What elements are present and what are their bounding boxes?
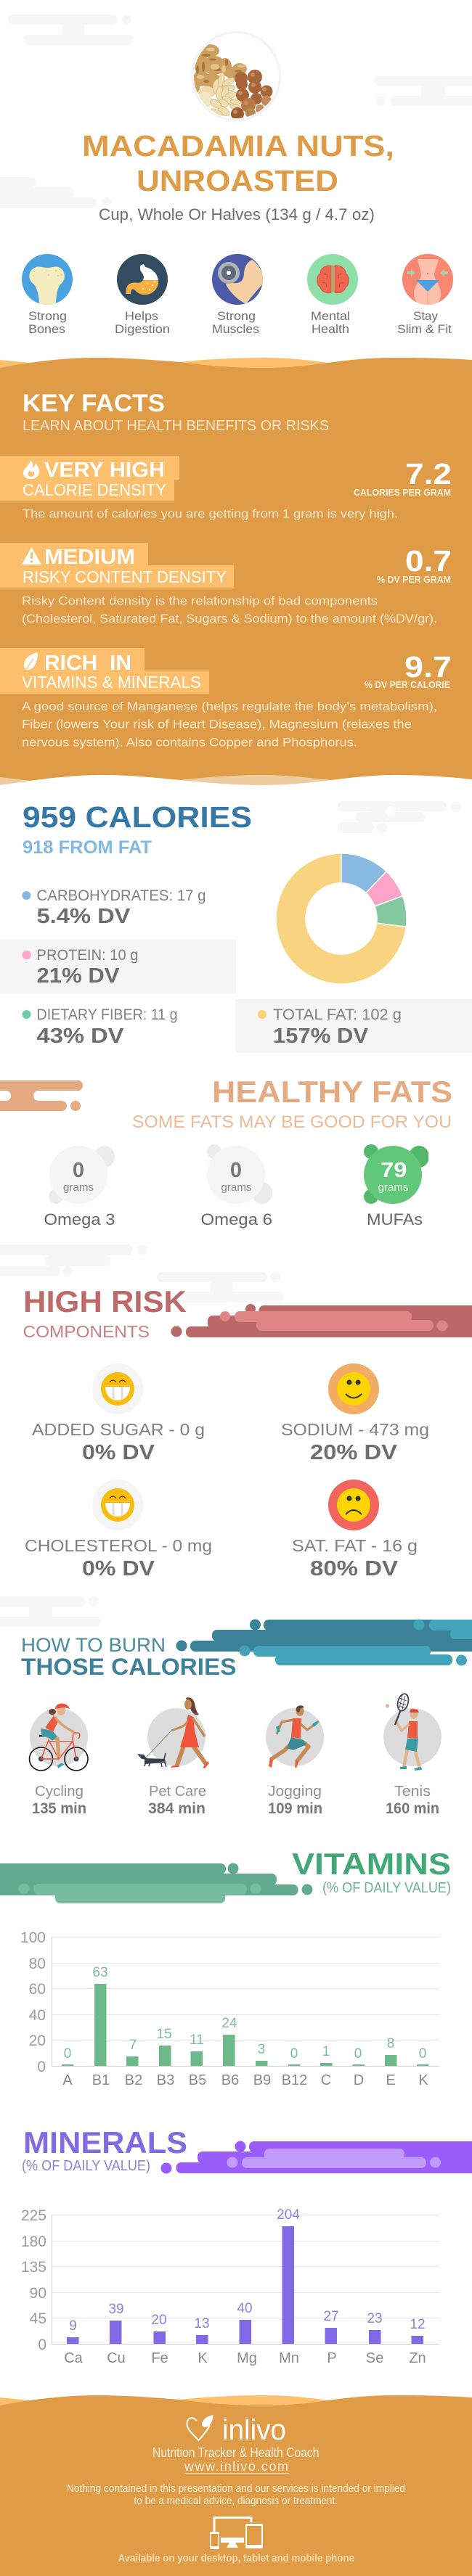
icon: smiling face (337, 1372, 370, 1406)
bar chart: vitamins (20, 1929, 439, 2088)
icon: strong bones: Strong (28, 309, 67, 323)
decorative banner (161, 2141, 472, 2174)
panel: vitamins (0, 1847, 451, 2088)
bar chart: minerals: 180 (21, 2234, 46, 2250)
icon: strong muscles (212, 254, 264, 336)
icon: helps digestion: Digestion (115, 322, 170, 336)
bar chart: vitamins: A (62, 2072, 73, 2088)
food photo: mixed nuts (192, 32, 280, 120)
bar chart: minerals: 90 (30, 2285, 46, 2302)
bar chart: minerals: Cu (107, 2350, 126, 2366)
icon: mental health: Health (312, 322, 349, 336)
vitamins heading: VITAMINS (292, 1847, 451, 1881)
icon: stay slim and fit (397, 254, 453, 336)
panel: how to burn those calories (21, 1620, 472, 1817)
item: sodium (281, 1363, 429, 1464)
minerals heading: (% OF DAILY VALUE) (22, 2158, 150, 2174)
bar chart: vitamins: 40 (29, 2007, 46, 2024)
bar chart: minerals: 23 (367, 2311, 383, 2326)
bar chart: vitamins: 11 (190, 2033, 204, 2048)
item: cholesterol: 0% DV (82, 1557, 155, 1580)
bar chart: vitamins: K (418, 2072, 428, 2088)
fact: rich in vitamins and minerals: Fiber (lowers Your risk of Heart Disease), Magnesium (relaxes the (22, 717, 412, 731)
healthy fats heading: SOME FATS MAY BE GOOD FOR YOU (132, 1112, 452, 1132)
icon: warning triangle (22, 547, 41, 565)
fact: risky content density: MEDIUM (44, 546, 135, 569)
legend: protein: PROTEIN: 10 g (36, 947, 138, 964)
icon: mental health (307, 254, 358, 336)
omega 6 badge (200, 1144, 272, 1228)
donut chart (276, 853, 407, 984)
icon: stay slim and fit: Slim & Fit (397, 322, 452, 336)
healthy fats heading: HEALTHY FATS (212, 1075, 452, 1109)
fact: rich in vitamins and minerals: VITAMINS & MINERALS (22, 673, 201, 692)
legend: protein: 21% DV (36, 964, 120, 988)
fact: rich in vitamins and minerals (0, 648, 452, 749)
bar chart: minerals: Fe (151, 2350, 168, 2366)
icon: flame (23, 460, 39, 479)
icon: grinning face (101, 1488, 134, 1522)
icon: cyclist (29, 1703, 88, 1771)
background clouds: top (0, 15, 472, 208)
footer (0, 2395, 472, 2576)
omega 6 badge: Omega 6 (200, 1210, 272, 1228)
mufas badge (364, 1144, 429, 1228)
fact: risky content density: Risky Content density is the relationship of bad components (22, 594, 378, 608)
bar chart: vitamins: 0 (37, 2059, 46, 2075)
bar chart: minerals: Mg (237, 2350, 257, 2366)
icon: strong muscles: Strong (217, 309, 256, 323)
fact: calorie density: CALORIE DENSITY (23, 480, 166, 499)
bar chart: minerals: 135 (21, 2259, 46, 2276)
key facts heading: KEY FACTS (23, 390, 165, 417)
item: added sugar: 0% DV (82, 1441, 155, 1464)
icon: strong bones (22, 254, 73, 336)
bar chart: vitamins: D (354, 2072, 364, 2088)
vitamins heading (292, 1847, 451, 1896)
activity: jogging: Jogging (268, 1784, 322, 1800)
how to burn heading (21, 1634, 237, 1680)
bar chart: vitamins: B3 (157, 2072, 174, 2088)
panel: key facts (0, 358, 472, 785)
fact: rich in vitamins and minerals: % DV PER CALORIE (365, 679, 450, 690)
calories heading (23, 800, 252, 858)
bar chart: vitamins: 24 (221, 2016, 237, 2031)
bar chart: vitamins: 0 (354, 2046, 362, 2062)
mufas badge: 79 (381, 1159, 407, 1182)
high risk heading: COMPONENTS (23, 1322, 150, 1341)
item: added sugar: ADDED SUGAR - 0 g (32, 1420, 205, 1439)
bar chart: vitamins: B5 (189, 2072, 206, 2088)
fact: risky content density: (Cholesterol, Saturated Fat, Sugars & Sodium) to the amount (%DV/gr). (22, 612, 437, 625)
legend: carbohydrates (22, 887, 206, 928)
fact: calorie density (0, 456, 452, 521)
panel: minerals (21, 2125, 472, 2366)
bar chart: vitamins: C (321, 2072, 331, 2088)
item: saturated fat (292, 1480, 418, 1580)
item: sodium: SODIUM - 473 mg (281, 1420, 429, 1439)
calories heading: 918 FROM FAT (23, 837, 152, 858)
bar chart: vitamins: B1 (92, 2072, 110, 2088)
bar chart: vitamins: 0 (290, 2046, 298, 2062)
fact: risky content density (0, 543, 452, 625)
omega 3 badge (44, 1146, 115, 1228)
icon: helps digestion: Helps (125, 309, 158, 323)
bar chart: vitamins: 100 (20, 1929, 46, 1946)
disclaimer: to be a medical advice, diagnosis or treatment. (134, 2495, 338, 2507)
fact: calorie density: CALORIES PER GRAM (354, 487, 451, 498)
benefit icons row (22, 254, 453, 336)
item: saturated fat: SAT. FAT - 16 g (292, 1536, 418, 1555)
bar chart: vitamins: 63 (92, 1965, 108, 1980)
logo: inlivo (187, 2414, 286, 2446)
minerals heading: MINERALS (23, 2125, 187, 2159)
fact: risky content density: RISKY CONTENT DENSITY (23, 567, 227, 586)
bar chart: vitamins: 60 (29, 1981, 46, 1998)
legend: dietary fiber (22, 1006, 177, 1048)
icon: helps digestion (115, 254, 170, 336)
bar chart: minerals: Zn (409, 2350, 426, 2366)
decorative banner (0, 1080, 83, 1111)
bar chart: vitamins: 3 (258, 2042, 265, 2057)
omega 3 badge: Omega 3 (44, 1210, 115, 1228)
activity: cycling: Cycling (35, 1784, 84, 1800)
omega 6 badge: 0 (230, 1159, 242, 1182)
bar chart: minerals: Se (366, 2350, 383, 2366)
activity: cycling (29, 1703, 88, 1817)
legend: dietary fiber: DIETARY FIBER: 11 g (36, 1006, 177, 1023)
how to burn heading: THOSE CALORIES (21, 1654, 237, 1680)
bar chart: minerals: 20 (151, 2313, 167, 2328)
header (82, 32, 394, 223)
activity: tennis (383, 1693, 442, 1817)
panel: healthy fats (0, 1075, 452, 1228)
activity: jogging (266, 1705, 324, 1817)
activity: pet care (137, 1697, 209, 1817)
legend band backgrounds (0, 940, 472, 1053)
icon: woman walking dog (137, 1697, 209, 1768)
bar chart: minerals (21, 2207, 439, 2366)
icon: tennis player (386, 1693, 422, 1771)
fact: calorie density: 7.2 (405, 457, 452, 491)
activity: pet care: Pet Care (149, 1784, 206, 1800)
activity: tennis: Tenis (394, 1784, 431, 1800)
activity: cycling: 135 min (32, 1800, 86, 1817)
bar chart: vitamins: 80 (29, 1956, 46, 1972)
icon: mental health: Mental (311, 309, 350, 323)
bar chart: minerals: Ca (64, 2350, 84, 2366)
legend: total fat (258, 1006, 402, 1048)
item: added sugar (32, 1363, 205, 1464)
mufas badge: grams (378, 1181, 408, 1194)
bar chart: vitamins: 20 (29, 2033, 46, 2049)
how to burn heading: HOW TO BURN (21, 1634, 166, 1656)
bar chart: vitamins: B2 (125, 2072, 142, 2088)
decorative banner (176, 1620, 472, 1666)
high risk heading (23, 1284, 187, 1341)
bar chart: vitamins: 0 (64, 2046, 71, 2062)
activity: tennis: 160 min (386, 1800, 439, 1817)
key facts heading (23, 390, 329, 434)
bar chart: vitamins: B12 (282, 2072, 307, 2088)
panel: calories (0, 800, 472, 1053)
activity: pet care: 384 min (148, 1800, 206, 1817)
serving size subtitle: Cup, Whole Or Halves (134 g / 4.7 oz) (99, 205, 375, 223)
healthy fats heading (132, 1075, 452, 1132)
fact: risky content density: 0.7 (405, 544, 452, 578)
bar chart: minerals: 0 (38, 2337, 46, 2353)
bar chart: vitamins: 8 (387, 2036, 394, 2051)
omega 6 badge: grams (221, 1181, 251, 1194)
fact: rich in vitamins and minerals: RICH IN (44, 652, 131, 675)
fact: calorie density: The amount of calories you are getting from 1 gram is very high. (23, 506, 398, 521)
background clouds: middle (0, 1244, 283, 1627)
legend: total fat: 157% DV (273, 1025, 369, 1048)
fact: rich in vitamins and minerals: A good source of Manganese (helps regulate the body’s metabolism), (22, 700, 437, 713)
bar chart: minerals: 204 (277, 2207, 300, 2223)
fact: risky content density: % DV PER GRAM (377, 574, 451, 585)
item: sodium: 20% DV (310, 1441, 398, 1464)
legend: carbohydrates: CARBOHYDRATES: 17 g (36, 887, 206, 904)
panel: high risk (23, 1284, 472, 1580)
bar chart: minerals: 40 (237, 2301, 253, 2316)
disclaimer: Nothing contained in this presentation and our services is intended or implied (67, 2482, 405, 2495)
activity: jogging: 109 min (268, 1800, 322, 1817)
mufas badge: MUFAs (367, 1210, 423, 1228)
omega 3 badge: grams (63, 1181, 94, 1194)
high risk heading: HIGH RISK (23, 1284, 187, 1318)
tagline: Nutrition Tracker & Health Coach (152, 2445, 320, 2460)
bar chart: minerals: 9 (69, 2318, 77, 2334)
decorative banner (171, 1304, 472, 1337)
bar chart: minerals: 225 (21, 2207, 46, 2224)
key facts heading: LEARN ABOUT HEALTH BENEFITS OR RISKS (23, 418, 329, 434)
website link: www.inlivo.com (184, 2459, 288, 2474)
bar chart: vitamins: B9 (253, 2072, 271, 2088)
bar chart: vitamins: E (386, 2072, 396, 2088)
decorative banner (0, 1863, 312, 1903)
vitamins heading: (% OF DAILY VALUE) (322, 1880, 451, 1896)
title: UNROASTED (137, 164, 338, 197)
fact: rich in vitamins and minerals: 9.7 (404, 650, 452, 684)
bar chart: minerals: 45 (30, 2310, 46, 2327)
bar chart: vitamins: 1 (322, 2044, 330, 2059)
bar chart: vitamins: 7 (129, 2038, 137, 2053)
icon: leaf (24, 652, 38, 670)
bar chart: minerals: P (327, 2350, 337, 2366)
title: MACADAMIA NUTS, (82, 129, 394, 163)
item: saturated fat: 80% DV (310, 1557, 399, 1580)
icon: strong muscles: Muscles (212, 322, 259, 336)
icon: desktop, tablet and phone (210, 2518, 263, 2549)
bar chart: vitamins: B6 (221, 2072, 239, 2088)
minerals heading (22, 2125, 187, 2174)
bar chart: minerals: 39 (108, 2302, 124, 2317)
calories heading: 959 CALORIES (23, 800, 252, 834)
disclaimer (67, 2482, 405, 2507)
fact: calorie density: VERY HIGH (44, 459, 165, 482)
icon: grinning face (101, 1372, 134, 1406)
bar chart: vitamins: 0 (419, 2046, 426, 2062)
availability note: Available on your desktop, tablet and mobile phone (118, 2552, 354, 2564)
legend: dietary fiber: 43% DV (36, 1025, 124, 1048)
icon: strong bones: Bones (28, 322, 65, 336)
omega 3 badge: 0 (73, 1159, 84, 1182)
legend: carbohydrates: 5.4% DV (36, 905, 131, 928)
bar chart: minerals: 12 (410, 2317, 426, 2332)
icon: sad face (337, 1488, 370, 1522)
legend: protein (22, 947, 138, 988)
legend: total fat: TOTAL FAT: 102 g (273, 1006, 402, 1023)
bar chart: minerals: 27 (323, 2309, 339, 2324)
icon: stay slim and fit: Stay (413, 309, 438, 323)
fact: rich in vitamins and minerals: nervous system). Also contains Copper and Phosphorus. (22, 736, 357, 749)
logo: inlivo: inlivo (222, 2414, 286, 2446)
bar chart: minerals: K (198, 2350, 208, 2366)
icon: jogger (269, 1705, 319, 1768)
bar chart: vitamins: 15 (156, 2027, 172, 2042)
item: cholesterol: CHOLESTEROL - 0 mg (25, 1536, 212, 1555)
bar chart: minerals: Mn (279, 2350, 299, 2366)
item: cholesterol (25, 1480, 212, 1580)
bar chart: minerals: 13 (194, 2316, 210, 2331)
title (82, 129, 394, 197)
